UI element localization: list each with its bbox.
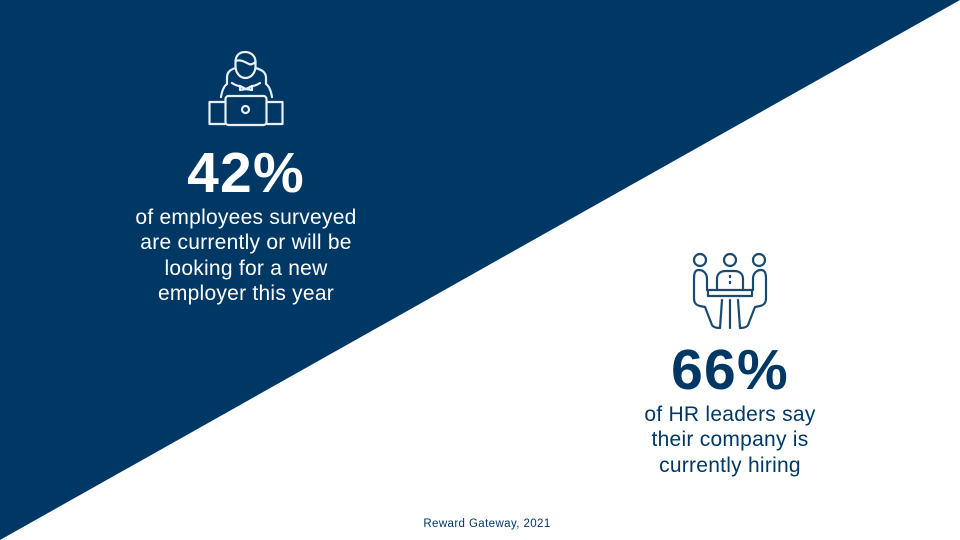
text: HR leaders	[644, 403, 816, 477]
text: HR leaders: of HR leaders say	[644, 403, 816, 426]
text: employees surveyed	[135, 206, 357, 305]
text: employees surveyed: employer this year	[158, 282, 334, 305]
stat: 42%: 42%	[187, 141, 305, 205]
text: HR leaders: their company is	[652, 428, 808, 451]
text: employees surveyed: looking for a new	[164, 257, 328, 280]
source citation: Reward Gateway, 2021	[423, 518, 551, 530]
text: HR leaders: currently hiring	[659, 454, 801, 477]
text: employees surveyed: of employees surveyed	[135, 206, 357, 229]
stat: 66%: 66%	[671, 338, 789, 402]
text: employees surveyed: are currently or will be	[140, 231, 352, 254]
